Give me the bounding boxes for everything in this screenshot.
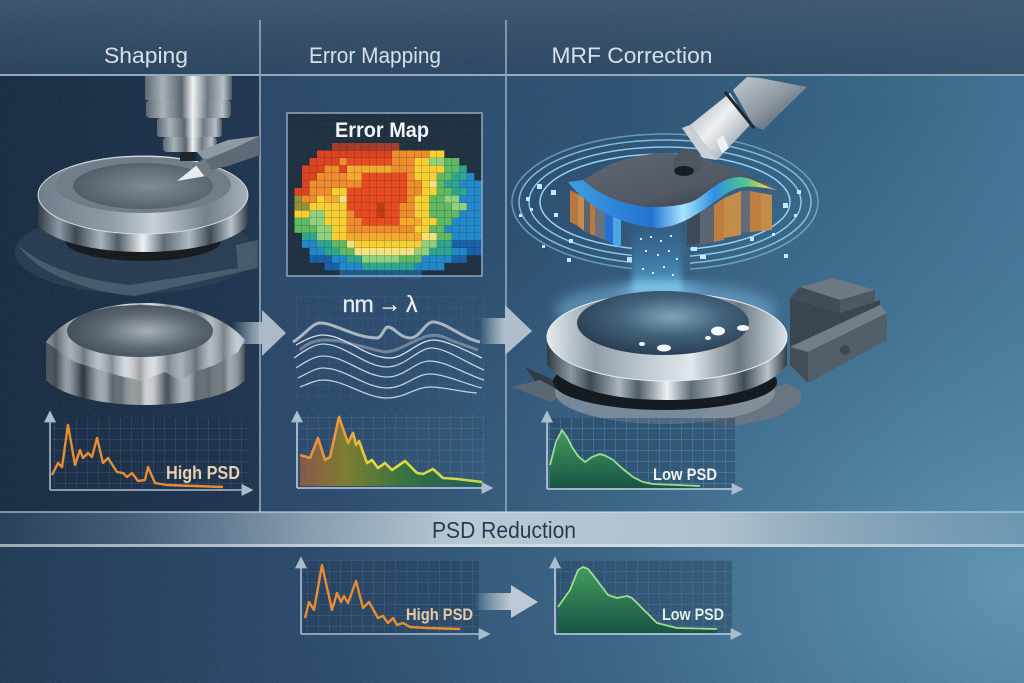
- icon: MRF tool head: [673, 77, 807, 176]
- illustration: blue ribbon: [568, 177, 777, 228]
- icon: base plate: [15, 210, 258, 296]
- icon: fixture right block: [790, 278, 887, 383]
- heading: Shaping: Shaping: [104, 43, 188, 68]
- heading: Error Mapping: Error Mapping: [309, 43, 441, 68]
- arrow: mapping to correction: [480, 305, 532, 355]
- icon: fixture tabs: [512, 354, 802, 428]
- panel: PSD reduction band: [0, 511, 1024, 547]
- label: Low PSD: Low PSD: [653, 465, 717, 484]
- chart line: bottom high PSD: [305, 565, 460, 629]
- illustration: beam: [620, 225, 700, 302]
- illustration: stacked bars right: [687, 191, 772, 246]
- icon: rough lens: [46, 303, 245, 405]
- chart: wave surface: [292, 295, 484, 400]
- label: nm to lambda: nm → λ: [342, 291, 418, 317]
- icon: polished lens: [547, 282, 787, 400]
- chart line: bottom low PSD: [558, 567, 717, 629]
- chart: bottom high PSD: [301, 560, 487, 634]
- icon: metal disk: [38, 156, 248, 252]
- chart: high PSD panel: [50, 414, 250, 490]
- icon: cutting tool: [177, 136, 260, 181]
- chart line: mid PSD: [300, 417, 482, 482]
- illustration: magnetic field rings: [512, 134, 818, 270]
- heading: PSD Reduction: PSD Reduction: [432, 517, 576, 543]
- chart line: high PSD: [52, 425, 223, 487]
- header band: [0, 0, 1024, 512]
- chart: low PSD panel: [547, 414, 740, 489]
- chart: mid PSD: [297, 414, 490, 488]
- label: Error Map: Error Map: [335, 119, 429, 142]
- panel: MRF correction: [512, 77, 887, 489]
- illustration: field sparkles: [519, 184, 801, 262]
- arrow: shaping to mapping: [232, 310, 286, 356]
- label: bottom High PSD: High PSD: [406, 605, 473, 624]
- panel: error mapping: [287, 113, 490, 488]
- chart line: low PSD: [550, 430, 700, 486]
- icon: spindle: [145, 76, 232, 161]
- label: High PSD: High PSD: [166, 463, 240, 483]
- illustration: grey sheet: [583, 153, 777, 207]
- label: bottom Low PSD: Low PSD: [662, 605, 724, 624]
- heatmap: error map: [287, 113, 482, 278]
- panel: shaping: [15, 76, 260, 490]
- heading: MRF Correction: MRF Correction: [552, 43, 712, 68]
- arrow: high to low PSD: [474, 585, 538, 618]
- chart: bottom low PSD: [555, 560, 739, 634]
- illustration: stacked bars left: [570, 190, 621, 248]
